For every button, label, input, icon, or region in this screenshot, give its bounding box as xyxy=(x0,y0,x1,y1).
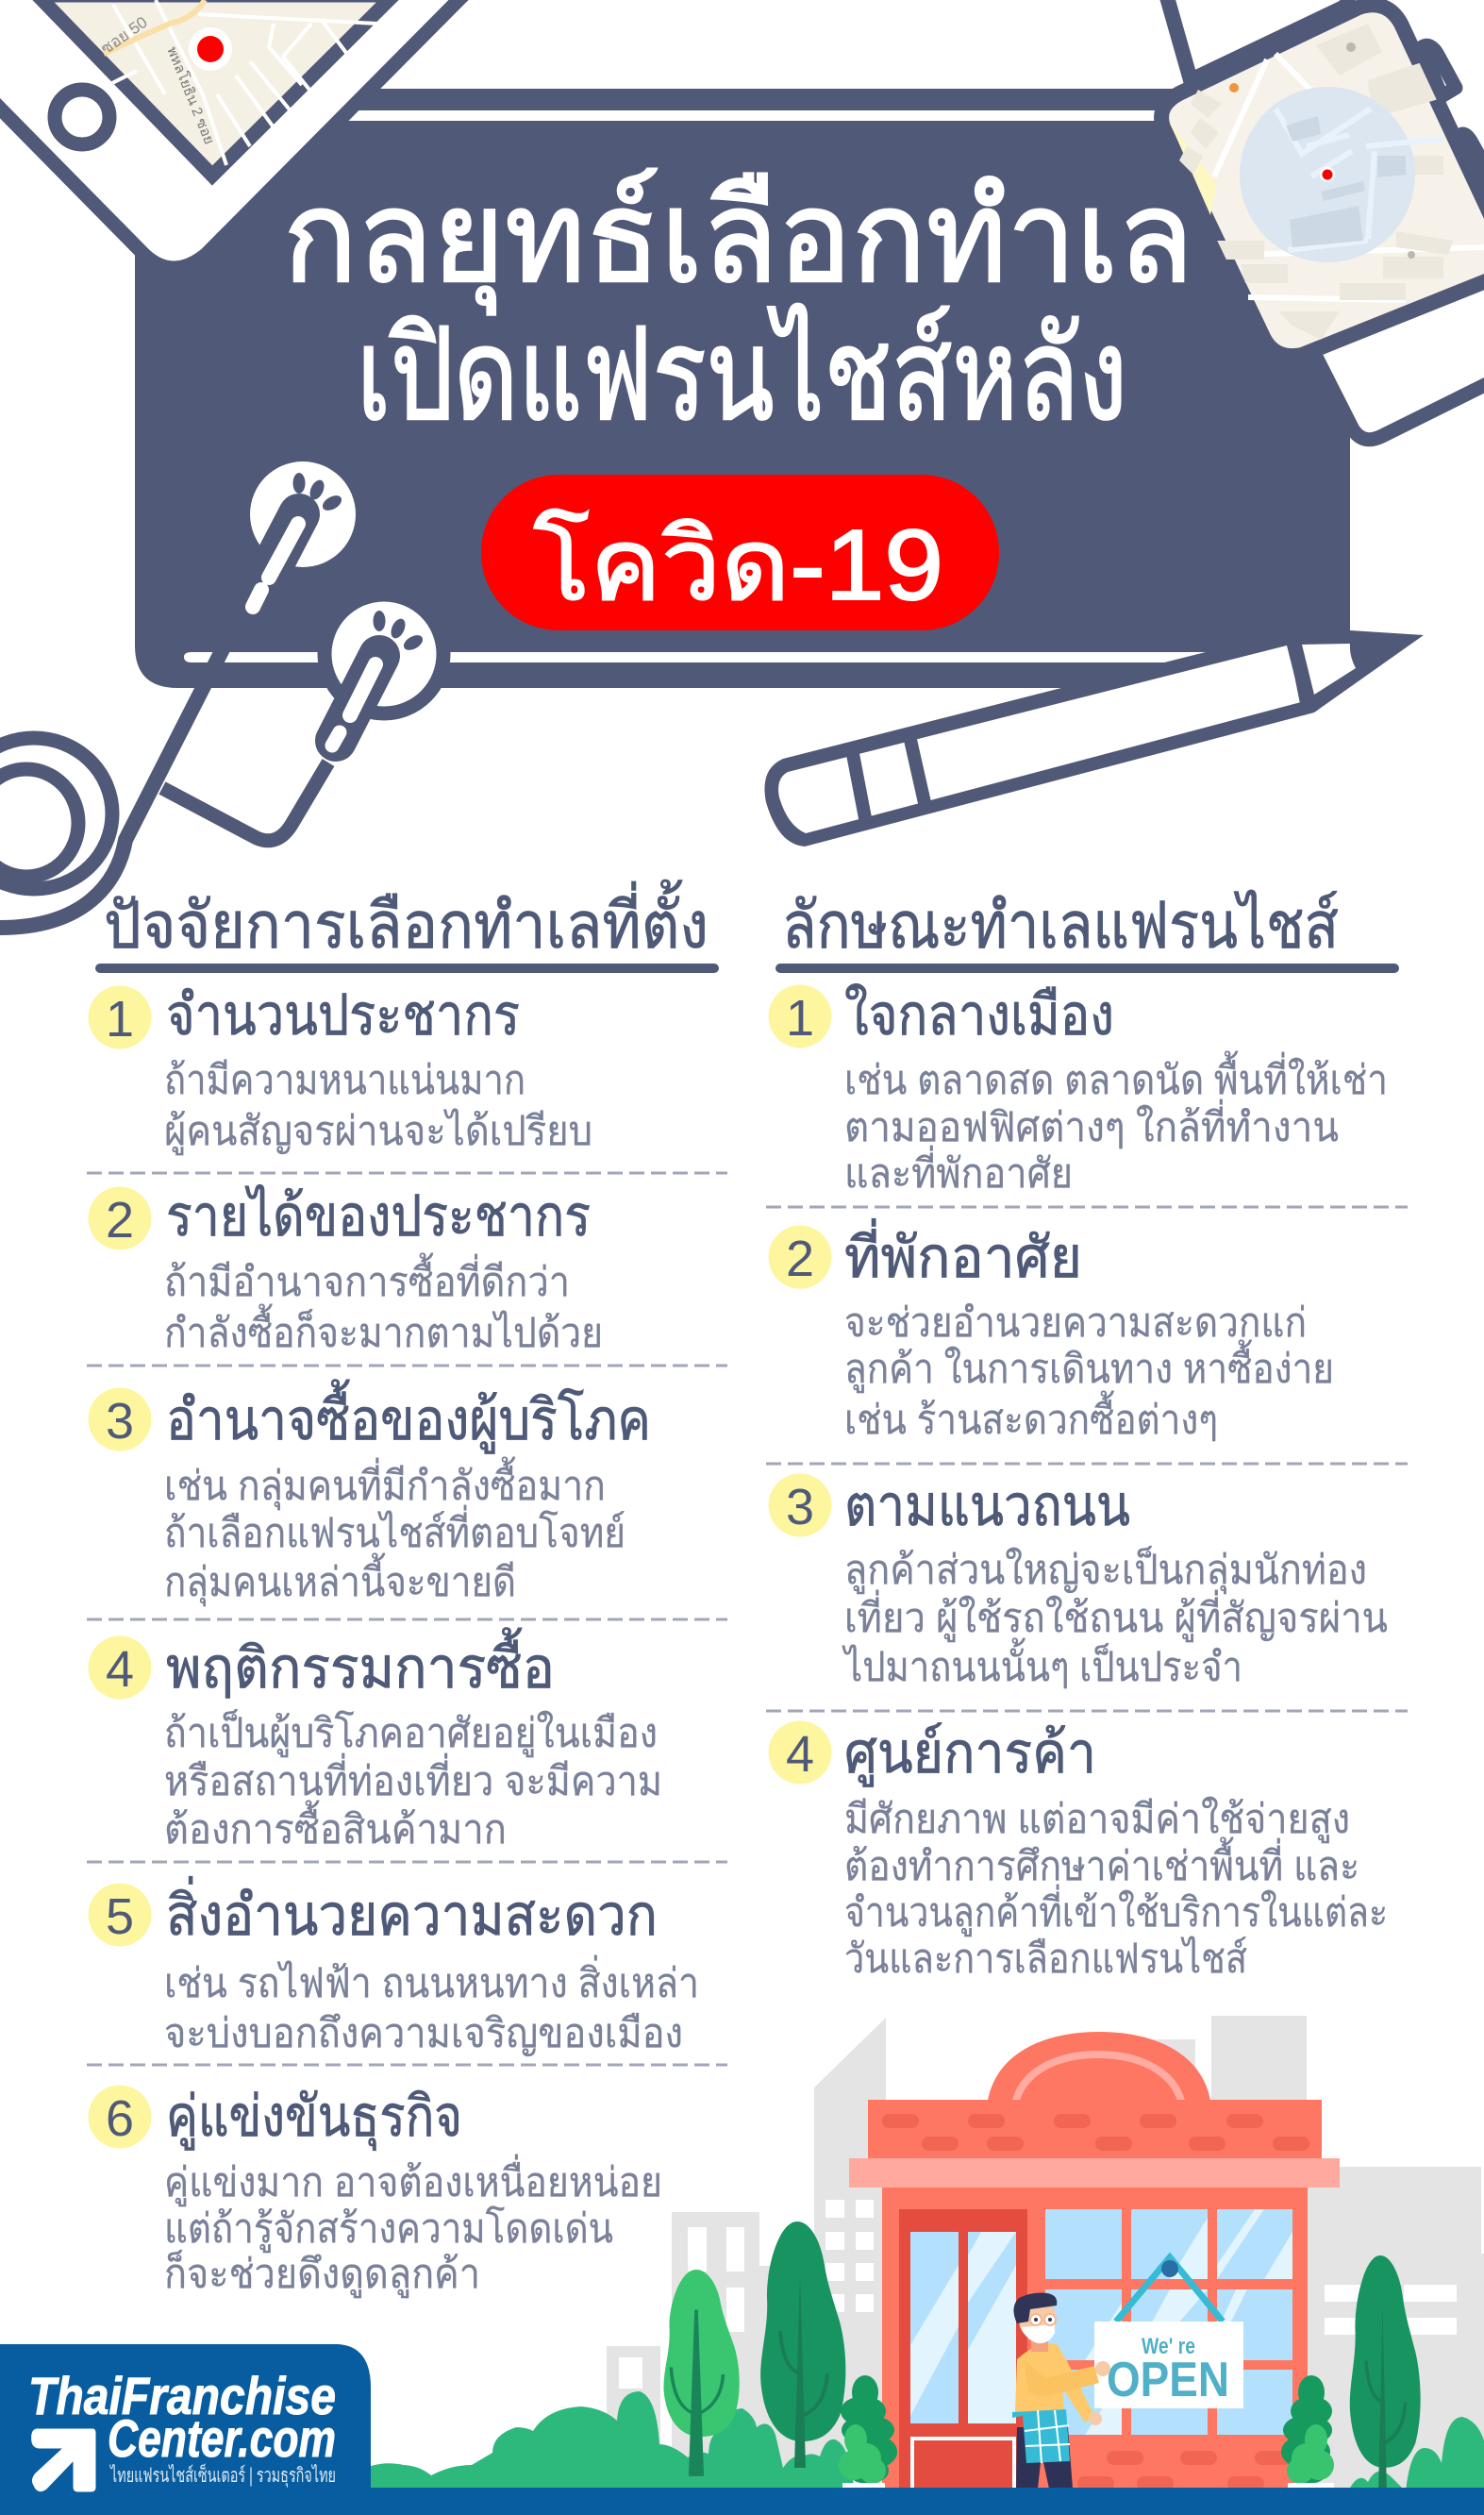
title: กลยุทธ์เลือกทำเล xyxy=(283,165,1193,315)
icon: smartwatch with map xyxy=(1161,0,1484,440)
right item 2: ลูกค้า ในการเดินทาง หาซื้อง่าย xyxy=(844,1339,1334,1394)
left item 5: จะบ่งบอกถึงความเจริญของเมือง xyxy=(164,2011,683,2056)
title: เปิดแฟรนไชส์หลัง xyxy=(357,303,1127,446)
right item 2: 2 xyxy=(786,1231,814,1287)
top stripe in panel xyxy=(347,110,1170,121)
right item 4: ศูนย์การค้า xyxy=(844,1721,1096,1787)
tree: left light xyxy=(663,2270,740,2474)
logo badge xyxy=(0,2344,371,2515)
red pill: covid-19: โควิด-19 xyxy=(533,510,943,621)
left item 3: กลุ่มคนเหล่านี้จะขายดี xyxy=(164,1552,516,1607)
left item 3 xyxy=(89,1379,651,1607)
red pill: covid-19 xyxy=(481,475,999,630)
tree: right dark xyxy=(1350,2255,1421,2515)
left item 3: อำนาจซื้อของผู้บริโภค xyxy=(166,1379,651,1454)
icon: pencil xyxy=(764,630,1424,847)
left item 2: รายได้ของประชากร xyxy=(166,1183,591,1248)
left item 6: แต่ถ้ารู้จักสร้างความโดดเด่น xyxy=(164,2205,613,2254)
shopkeeper with mask xyxy=(1012,2293,1110,2489)
left item 4: ต้องการซื้อสินค้ามาก xyxy=(164,1800,507,1853)
left item 5: สิ่งอำนวยความสะดวก xyxy=(166,1876,658,1947)
left item 3: ถ้าเลือกแฟรนไชส์ที่ตอบโจทย์ xyxy=(164,1505,625,1556)
right item 2: จะช่วยอำนวยความสะดวกแก่ xyxy=(844,1300,1307,1346)
right item 4: ต้องทำการศึกษาค่าเช่าพื้นที่ และ xyxy=(844,1836,1359,1889)
shrub: right xyxy=(1281,2375,1334,2489)
left item 1 xyxy=(89,983,592,1156)
ground bar xyxy=(0,2488,1484,2515)
panel: title background xyxy=(135,89,1350,688)
right item 3: ตามแนวถนน xyxy=(844,1474,1130,1537)
left item 2: ถ้ามีอำนาจการซื้อที่ดีกว่า xyxy=(164,1252,570,1305)
left item 4: หรือสถานที่ท่องเที่ยว จะมีความ xyxy=(164,1753,662,1804)
left item 1: ผู้คนสัญจรผ่านจะได้เปรียบ xyxy=(164,1108,592,1156)
title xyxy=(283,165,1193,446)
left item 4: 4 xyxy=(106,1641,134,1698)
left item 2: กำลังซื้อก็จะมากตามไปด้วย xyxy=(164,1303,603,1356)
left item 1: จำนวนประชากร xyxy=(166,983,520,1047)
right item 1: ตามออฟฟิศต่างๆ ใกล้ที่ทำงาน xyxy=(844,1099,1339,1150)
logo badge: ThaiFranchise xyxy=(28,2366,336,2425)
right item 3: เที่ยว ผู้ใช้รถใช้ถนน ผู้ที่สัญจรผ่าน xyxy=(844,1590,1388,1643)
tree: centre dark xyxy=(760,2222,845,2468)
hanging open sign: We' re xyxy=(1142,2334,1195,2359)
right item 4: จำนวนลูกค้าที่เข้าใช้บริการในแต่ละ xyxy=(844,1885,1388,1937)
right item 4: 4 xyxy=(786,1726,814,1783)
ground bushes xyxy=(371,2391,1484,2496)
left item 3: 3 xyxy=(106,1393,134,1450)
right column heading: ลักษณะทำเลแฟรนไชส์ xyxy=(782,889,1339,962)
right item 4: วันและการเลือกแฟรนไชส์ xyxy=(844,1936,1247,1982)
left item 2: 2 xyxy=(106,1192,134,1249)
logo badge: Center.com xyxy=(108,2408,336,2468)
right item 1: 1 xyxy=(786,990,814,1047)
left item 5: เช่น รถไฟฟ้า ถนนหนทาง สิ่งเหล่า xyxy=(164,1955,699,2006)
icon: smartphone with map xyxy=(0,0,491,268)
right item 4 xyxy=(768,1721,1388,1982)
hanging open sign: OPEN xyxy=(1107,2353,1229,2407)
left item 1: ถ้ามีความหนาแน่นมาก xyxy=(164,1058,525,1103)
left item 4: พฤติกรรมการซื้อ xyxy=(166,1627,555,1700)
right item 3 xyxy=(768,1474,1388,1690)
city buildings background xyxy=(607,2016,1484,2492)
left item 6: คู่แข่งมาก อาจต้องเหนื่อยหน่อย xyxy=(164,2155,662,2207)
right item 1 xyxy=(768,983,1388,1197)
left item 6 xyxy=(89,2085,662,2299)
left item 5: 5 xyxy=(106,1888,134,1945)
left column heading: ปัจจัยการเลือกทำเลที่ตั้ง xyxy=(104,880,709,962)
bottom stripe in panel xyxy=(184,652,1206,662)
right item 2: ที่พักอาศัย xyxy=(844,1218,1082,1289)
left item 3: เช่น กลุ่มคนที่มีกำลังซื้อมาก xyxy=(164,1456,606,1511)
right item 3: 3 xyxy=(786,1479,814,1535)
right item 1: เช่น ตลาดสด ตลาดนัด พื้นที่ให้เช่า xyxy=(844,1050,1388,1103)
left item 5 xyxy=(89,1876,699,2056)
left item 2 xyxy=(89,1183,603,1356)
left item 6: คู่แข่งขันธุรกิจ xyxy=(166,2085,462,2151)
icon: earphones and cable xyxy=(0,461,443,928)
right item 2: เช่น ร้านสะดวกซื้อต่างๆ xyxy=(844,1390,1218,1443)
logo badge: ไทยแฟรนไชส์เซ็นเตอร์ | รวมธุรกิจไทย xyxy=(109,2462,336,2488)
shrub: left xyxy=(839,2375,897,2489)
shop building xyxy=(849,2032,1340,2490)
right item 1: และที่พักอาศัย xyxy=(844,1146,1073,1197)
icon: smartphone with map: พหลโยธิน 2 ซอย xyxy=(163,44,218,146)
hanging open sign xyxy=(1094,2257,1243,2408)
left item 4 xyxy=(89,1627,662,1853)
left item 4: ถ้าเป็นผู้บริโภคอาศัยอยู่ในเมือง xyxy=(164,1709,658,1758)
icon: smartphone with map: ซอย 50 xyxy=(97,13,151,58)
right item 1: ใจกลางเมือง xyxy=(844,983,1114,1047)
left item 6: 6 xyxy=(106,2090,134,2147)
left item 6: ก็จะช่วยดึงดูดลูกค้า xyxy=(164,2250,480,2299)
right item 4: มีศักยภาพ แต่อาจมีค่าใช้จ่ายสูง xyxy=(844,1796,1350,1844)
left item 1: 1 xyxy=(106,991,134,1048)
right item 3: ไปมาถนนนั้นๆ เป็นประจำ xyxy=(842,1637,1242,1690)
right item 2 xyxy=(768,1218,1334,1443)
right item 3: ลูกค้าส่วนใหญ่จะเป็นกลุ่มนักท่อง xyxy=(844,1546,1367,1595)
